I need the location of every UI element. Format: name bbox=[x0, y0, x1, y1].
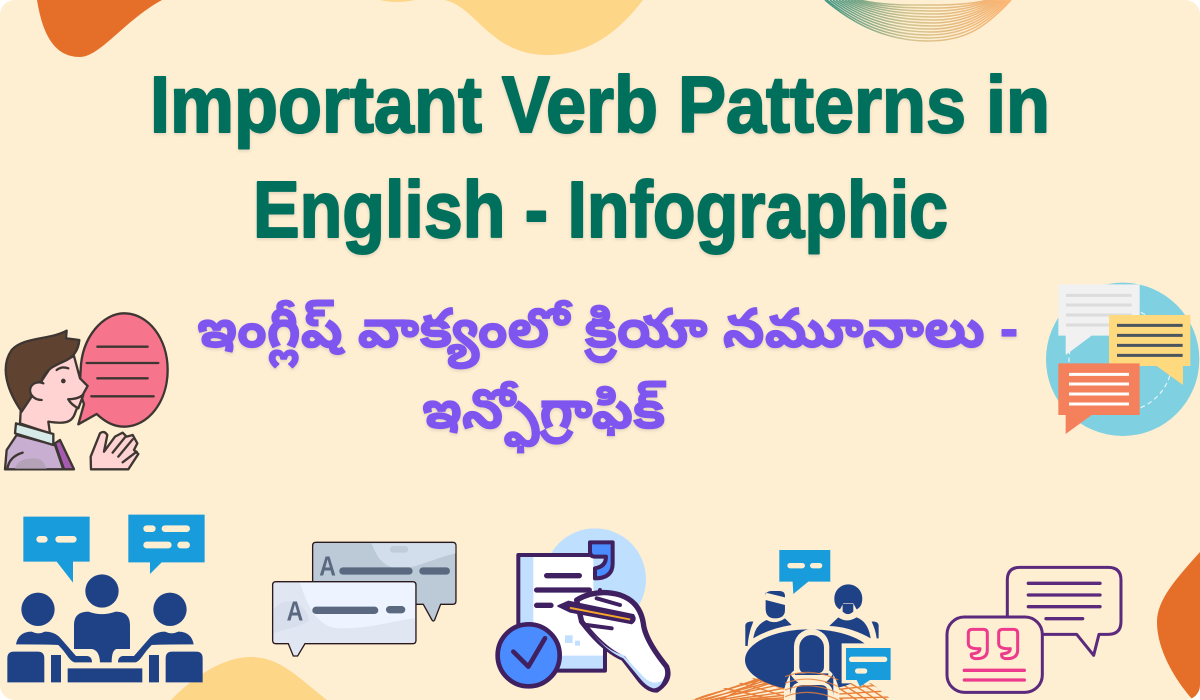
subtitle line 2: ఇన్ఫోగ్రాఫిక్ bbox=[422, 380, 666, 453]
front chair bbox=[784, 629, 839, 700]
subtitle line 1: ఇంగ్లీష్ వాక్యంలో క్రియా నమూనాలు - bbox=[197, 299, 1018, 369]
hand bbox=[577, 593, 668, 690]
yellow bubble bbox=[1109, 315, 1190, 385]
letter A back: A bbox=[319, 551, 336, 582]
white bubble bbox=[1058, 284, 1140, 355]
people bbox=[7, 574, 203, 682]
title bbox=[150, 60, 1050, 254]
icon: writing hand with document bbox=[498, 528, 668, 690]
bubble bottom right bbox=[842, 643, 872, 684]
people and table bbox=[745, 584, 879, 691]
icon: man speaking with speech bubble bbox=[5, 313, 168, 469]
blob: bottom-left yellow bbox=[171, 657, 327, 700]
title line 2: English - Infographic bbox=[253, 165, 948, 254]
front bubble bbox=[273, 582, 416, 656]
document bbox=[533, 557, 603, 656]
mesh over chair bbox=[785, 672, 838, 700]
icon: three people talking bbox=[7, 515, 205, 682]
orange bubble bbox=[1058, 363, 1140, 434]
blob: bottom-right orange bbox=[1157, 552, 1200, 700]
icon: quote and speech bubbles bbox=[947, 567, 1121, 692]
title line 1: Important Verb Patterns in bbox=[150, 60, 1050, 149]
icon: chat bubbles on blue circle bbox=[1046, 283, 1199, 436]
pen bbox=[558, 602, 635, 623]
mesh pattern: bottom centre bbox=[692, 678, 890, 700]
bubble right bbox=[128, 515, 205, 574]
Telugu subtitle bbox=[197, 299, 1018, 453]
icon: two language speech bubbles bbox=[273, 542, 456, 656]
letter A front: A bbox=[287, 596, 304, 627]
icon: round table meeting bbox=[745, 550, 893, 700]
wave pattern: top right bbox=[825, 0, 1011, 41]
check badge bbox=[498, 624, 560, 686]
back bubble bbox=[313, 542, 456, 621]
blob: top-left orange bbox=[37, 0, 162, 57]
quote mark bbox=[590, 542, 613, 578]
bubble top bbox=[779, 550, 830, 594]
bubble left bbox=[23, 517, 90, 583]
blob: top yellow bbox=[380, 0, 643, 55]
